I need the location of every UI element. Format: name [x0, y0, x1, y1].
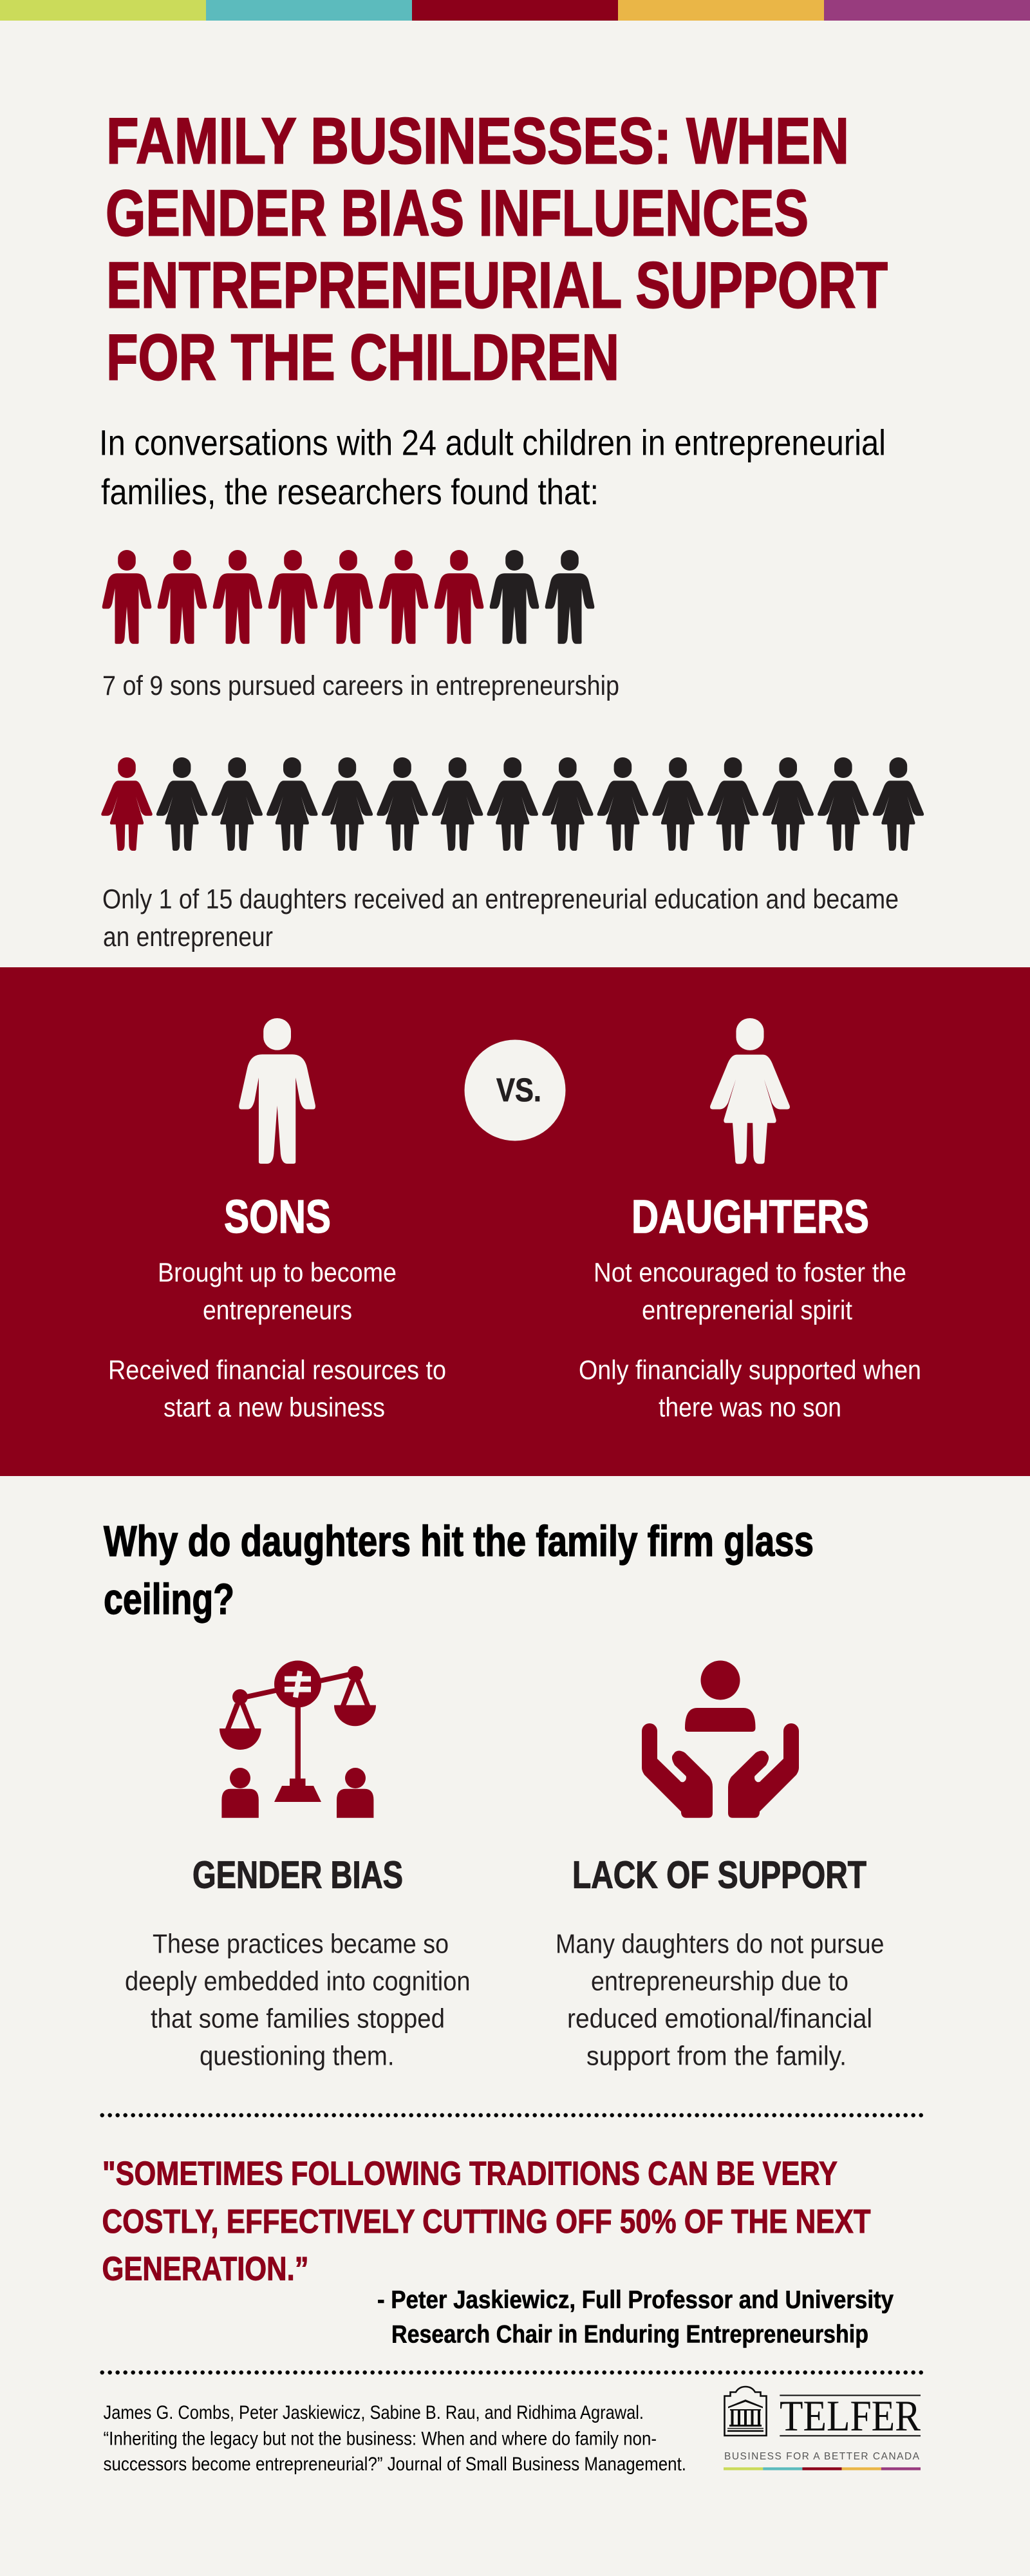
quote attribution: - Peter Jaskiewicz, Full Professor and University: [377, 2286, 894, 2314]
logo tagline: BUSINESS FOR A BETTER CANADA: [724, 2451, 920, 2462]
heading: daughters: DAUGHTERS: [632, 1191, 869, 1243]
top colour stripe: [0, 0, 1030, 21]
text: lack of support explanation: support from the family.: [586, 2040, 847, 2071]
text: gender bias explanation: that some families stopped: [151, 2003, 445, 2034]
logo wordmark: TELFER: [780, 2391, 921, 2440]
citation: James G. Combs, Peter Jaskiewicz, Sabine B. Rau, and Ridhima Agrawal.: [103, 2402, 644, 2423]
heading: glass ceiling question: ceiling?: [104, 1575, 234, 1624]
citation: successors become entrepreneurial?” Journal of Small Business Management.: [103, 2454, 686, 2475]
text: daughters points: [579, 1257, 921, 1422]
vs badge: VS.: [496, 1072, 541, 1108]
logo: Telfer: [724, 2387, 921, 2470]
heading: glass ceiling question: [104, 1517, 814, 1624]
text: lack of support explanation: Many daughters do not pursue: [556, 1928, 885, 1959]
pictogram: 7 of 9 sons: [102, 550, 594, 644]
pull quote: "SOMETIMES FOLLOWING TRADITIONS CAN BE VERY: [102, 2155, 838, 2192]
pull quote: COSTLY, EFFECTIVELY CUTTING OFF 50% OF THE NEXT: [102, 2202, 870, 2240]
text: lack of support explanation: entrepreneurship due to: [591, 1965, 848, 1996]
intro text: In conversations with 24 adult children in entrepreneurial: [99, 422, 886, 462]
pull quote: GENERATION.”: [102, 2250, 309, 2287]
pictogram: 1 of 15 daughters: [101, 757, 924, 851]
title: [106, 106, 888, 394]
pull quote: [102, 2155, 870, 2287]
caption: sons: 7 of 9 sons pursued careers in entrepreneurship: [102, 670, 619, 701]
caption: daughters: [102, 884, 899, 952]
intro text: families, the researchers found that:: [101, 471, 599, 512]
quote attribution: Research Chair in Enduring Entrepreneurship: [391, 2321, 868, 2348]
text: daughters points: Only financially supported when: [579, 1355, 921, 1385]
text: sons points: start a new business: [164, 1392, 385, 1422]
text: gender bias explanation: deeply embedded into cognition: [125, 1965, 470, 1996]
icon: scales with two people: [220, 1660, 376, 1818]
icon: son: [239, 1018, 315, 1164]
title: FAMILY BUSINESSES: WHEN: [106, 106, 849, 178]
text: gender bias explanation: [125, 1928, 470, 2071]
title: FOR THE CHILDREN: [106, 322, 619, 394]
caption: daughters: Only 1 of 15 daughters received an entrepreneurial education and became: [102, 884, 899, 914]
citation: “Inheriting the legacy but not the business: When and where do family non-: [103, 2428, 657, 2450]
icon: hands supporting a person: [642, 1660, 799, 1818]
logo building mark: [725, 2387, 766, 2436]
panel: sons vs daughters: [0, 967, 1030, 1476]
heading: glass ceiling question: Why do daughters hit the family firm glass: [104, 1517, 814, 1566]
intro text: [99, 422, 886, 512]
text: lack of support explanation: [556, 1928, 885, 2071]
text: sons points: Received financial resources to: [108, 1355, 446, 1385]
heading: lack of support: LACK OF SUPPORT: [572, 1853, 866, 1896]
title: GENDER BIAS INFLUENCES: [106, 178, 809, 250]
heading: gender bias: GENDER BIAS: [192, 1853, 403, 1896]
text: sons points: Brought up to become: [158, 1257, 397, 1287]
heading: sons: SONS: [224, 1191, 331, 1243]
quote attribution: [377, 2286, 894, 2348]
text: daughters points: there was no son: [659, 1392, 841, 1422]
caption: daughters: an entrepreneur: [103, 922, 273, 952]
text: daughters points: entreprenerial spirit: [642, 1294, 852, 1325]
text: sons points: entrepreneurs: [203, 1294, 352, 1325]
text: lack of support explanation: reduced emotional/financial: [567, 2003, 872, 2034]
vs badge: [465, 1039, 565, 1141]
text: gender bias explanation: These practices became so: [153, 1928, 449, 1959]
icon: daughter: [710, 1018, 790, 1164]
text: sons points: [108, 1257, 446, 1422]
citation: [103, 2402, 686, 2475]
logo colour stripe: [724, 2467, 921, 2470]
text: daughters points: Not encouraged to foster the: [594, 1257, 906, 1287]
text: gender bias explanation: questioning them.: [200, 2040, 394, 2071]
